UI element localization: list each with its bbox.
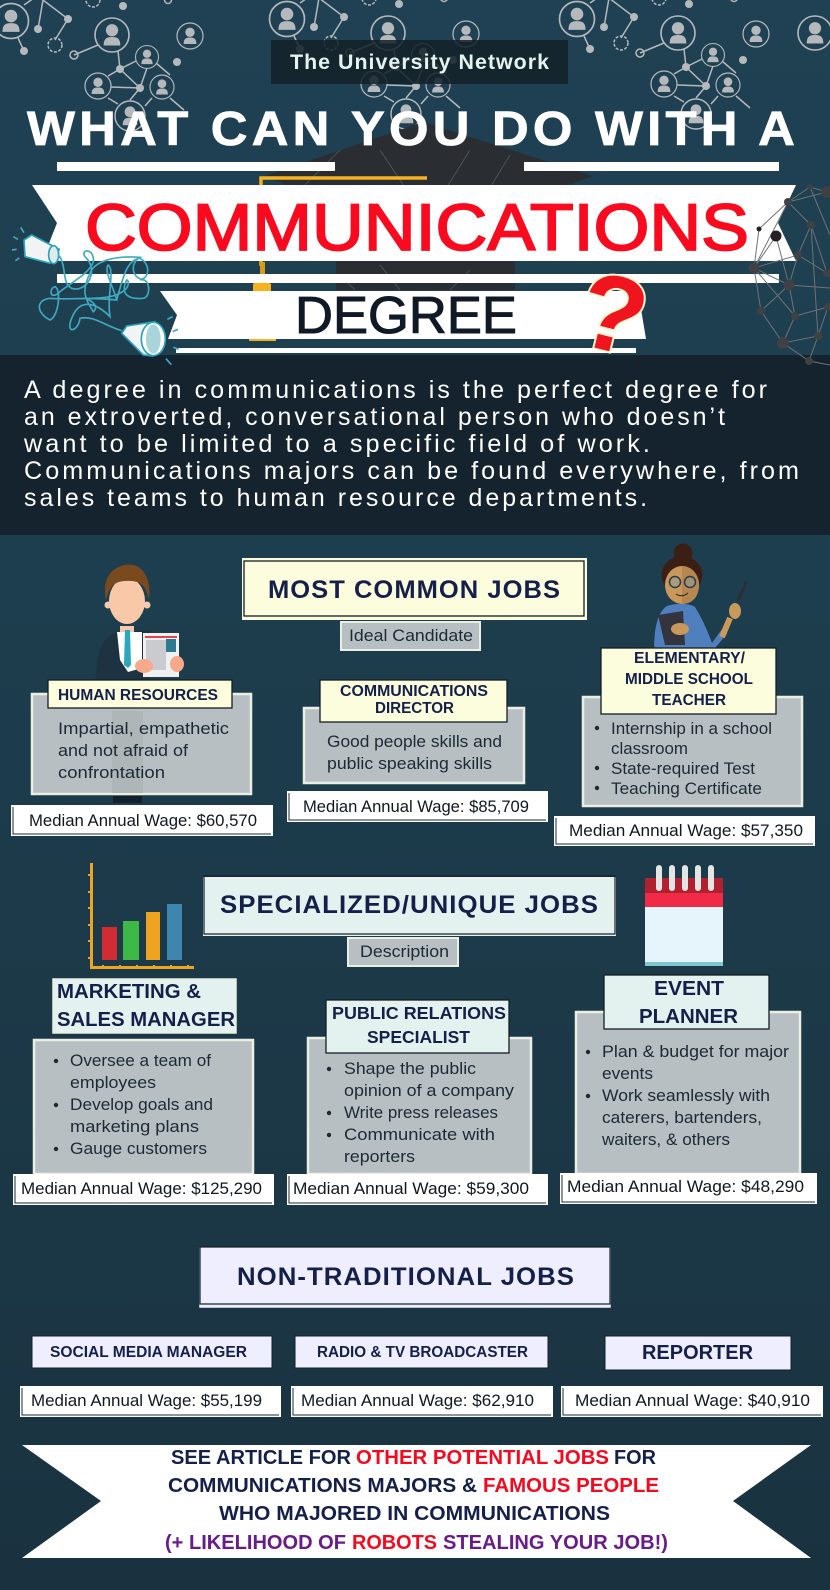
footer banner: call to action: OTHER POTENTIAL JOBS (356, 1447, 609, 1469)
footer banner: call to action: WHO MAJORED IN COMMUNICATIONS (219, 1503, 610, 1525)
illustration: businessman with newspaper (95, 565, 184, 705)
title line: what can you do with a: WHAT CAN YOU DO WITH A (27, 103, 799, 156)
wage: marketing and sales manager (13, 1174, 274, 1205)
footer banner: call to action: FOR (614, 1447, 657, 1469)
footer banner: call to action: STEALING YOUR JOB!) (443, 1532, 668, 1554)
panel: event planner: Work seamlessly with (602, 1087, 770, 1105)
heading: elementary and middle school teacher (601, 648, 776, 714)
heading: marketing and sales manager (53, 979, 236, 1033)
panel: human resources: and not afraid of (58, 742, 188, 760)
sublabel: description (348, 938, 458, 966)
heading: public relations specialist (326, 1000, 509, 1053)
heading: marketing and sales manager: MARKETING & (57, 981, 201, 1003)
wage: social media manager (20, 1386, 281, 1417)
panel: communications director (304, 680, 524, 783)
wage: radio and tv broadcaster: Median Annual Wage: $62,910 (301, 1392, 534, 1410)
section heading: specialized and unique jobs (204, 876, 615, 935)
panel: marketing and sales manager: Develop goals and (70, 1096, 213, 1114)
footer banner: call to action: FAMOUS PEOPLE (483, 1475, 659, 1497)
heading: public relations specialist: SPECIALIST (367, 1027, 470, 1047)
heading: radio and tv broadcaster: RADIO & TV BROADCASTER (317, 1344, 528, 1361)
intro band: an extroverted, conversational person who doesn’t (24, 403, 728, 431)
wage: social media manager: Median Annual Wage: $55,199 (31, 1392, 262, 1410)
panel: communications director: public speaking skills (327, 755, 492, 773)
section heading: non-traditional jobs: NON-TRADITIONAL JOBS (237, 1263, 575, 1291)
section heading: most common jobs: MOST COMMON JOBS (268, 576, 561, 604)
footer banner: call to action: SEE ARTICLE FOR (171, 1447, 352, 1469)
sublabel: description: Description (360, 943, 449, 961)
icon: question mark: ? (566, 247, 660, 380)
top label: The University Network (271, 40, 568, 84)
heading: elementary and middle school teacher: TEACHER (652, 692, 726, 709)
section heading: most common jobs (243, 559, 586, 619)
intro band: A degree in communications is the perfect degree for (24, 376, 770, 404)
heading: human resources (48, 680, 232, 708)
panel: marketing and sales manager: marketing plans (70, 1118, 199, 1136)
panel: event planner: caterers, bartenders, (602, 1109, 762, 1127)
panel: elementary and middle school teacher: Internship in a school (611, 720, 772, 738)
wage: radio and tv broadcaster (291, 1386, 553, 1417)
heading: reporter: REPORTER (642, 1342, 754, 1364)
icon: wireframe globe (748, 184, 830, 365)
heading: event planner: EVENT (654, 978, 724, 1000)
panel: marketing and sales manager: employees (70, 1074, 156, 1092)
panel: marketing and sales manager: Gauge customers (70, 1140, 207, 1158)
panel: public relations specialist: Shape the public (344, 1060, 476, 1078)
heading: communications director: COMMUNICATIONS (340, 683, 488, 700)
wage: public relations specialist: Median Annual Wage: $59,300 (293, 1180, 529, 1198)
panel: communications director: Good people skills and (327, 733, 502, 751)
heading: event planner (604, 975, 769, 1029)
wage: event planner (560, 1173, 817, 1204)
panel: event planner: waiters, & others (601, 1131, 730, 1149)
sublabel: ideal candidate (341, 622, 480, 650)
wage: human resources (11, 805, 273, 836)
panel: human resources: confrontation (58, 764, 165, 782)
wage: human resources: Median Annual Wage: $60,570 (29, 812, 257, 830)
heading: social media manager (32, 1336, 272, 1368)
panel: elementary and middle school teacher (583, 648, 802, 806)
panel: human resources (32, 680, 251, 803)
footer banner: call to action: COMMUNICATIONS MAJORS & (168, 1475, 477, 1497)
heading: radio and tv broadcaster (295, 1336, 548, 1368)
heading: public relations specialist: PUBLIC RELATIONS (332, 1003, 506, 1023)
panel: human resources: Impartial, empathetic (58, 720, 229, 738)
heading: elementary and middle school teacher: ELEMENTARY/ (634, 650, 746, 667)
intro band: Communications majors can be found everywhere, from (24, 457, 802, 485)
panel: public relations specialist: Write press releases (344, 1104, 498, 1122)
network pattern (0, 0, 830, 131)
white divider bar with degree banner: DEGREE (295, 287, 517, 345)
sublabel: ideal candidate: Ideal Candidate (349, 627, 473, 645)
heading: marketing and sales manager: SALES MANAGER (57, 1009, 236, 1031)
panel: public relations specialist (308, 1000, 531, 1174)
panel: elementary and middle school teacher: classroom (611, 740, 688, 758)
icon: bar chart (88, 863, 194, 968)
footer banner: call to action (22, 1445, 811, 1558)
panel: public relations specialist: opinion of a company (344, 1082, 515, 1100)
white divider bar with degree banner (57, 274, 779, 353)
footer banner: call to action: ROBOTS (352, 1532, 437, 1554)
heading: communications director: DIRECTOR (375, 700, 454, 717)
heading: event planner: PLANNER (639, 1006, 739, 1028)
section heading: non-traditional jobs (200, 1247, 610, 1307)
panel: marketing and sales manager: Oversee a team of (70, 1052, 211, 1070)
white divider bars (57, 162, 779, 171)
intro band: sales teams to human resource departments. (24, 484, 650, 512)
wage: public relations specialist (287, 1174, 548, 1205)
heading: reporter (605, 1336, 791, 1370)
heading: social media manager: SOCIAL MEDIA MANAGER (50, 1344, 247, 1361)
panel: event planner (576, 975, 800, 1174)
wage: reporter: Median Annual Wage: $40,910 (575, 1392, 810, 1410)
panel: event planner: Plan & budget for major (602, 1043, 790, 1061)
icon: calendar (645, 868, 723, 966)
heading: human resources: HUMAN RESOURCES (58, 687, 218, 704)
banner: communications: COMMUNICATIONS (85, 190, 749, 264)
panel: elementary and middle school teacher: State-required Test (611, 760, 755, 778)
intro band (0, 355, 830, 535)
panel: public relations specialist: reporters (344, 1148, 415, 1166)
footer banner: call to action: (+ LIKELIHOOD OF (165, 1532, 346, 1554)
heading: communications director (320, 680, 507, 722)
illustration: teacher with pointer (654, 544, 746, 648)
wage: communications director (287, 791, 548, 822)
section heading: specialized and unique jobs: SPECIALIZED/UNIQUE JOBS (220, 891, 599, 919)
panel: public relations specialist: Communicate with (344, 1126, 495, 1144)
heading: elementary and middle school teacher: MIDDLE SCHOOL (625, 671, 753, 688)
panel: elementary and middle school teacher: Teaching Certificate (611, 780, 762, 798)
wage: communications director: Median Annual Wage: $85,709 (303, 798, 529, 816)
wage: reporter (561, 1386, 823, 1417)
intro band: want to be limited to a specific field of work. (23, 430, 653, 458)
panel: marketing and sales manager (34, 1040, 253, 1174)
wage: teacher (554, 816, 815, 846)
icon: tin can telephone (12, 227, 179, 365)
top label: The University Network: The University Network (290, 51, 550, 74)
wage: teacher: Median Annual Wage: $57,350 (569, 822, 803, 840)
wage: marketing and sales manager: Median Annual Wage: $125,290 (21, 1180, 262, 1198)
graduation cap illustration (249, 122, 593, 341)
panel: event planner: events (602, 1065, 653, 1083)
wage: event planner: Median Annual Wage: $48,290 (567, 1178, 804, 1196)
